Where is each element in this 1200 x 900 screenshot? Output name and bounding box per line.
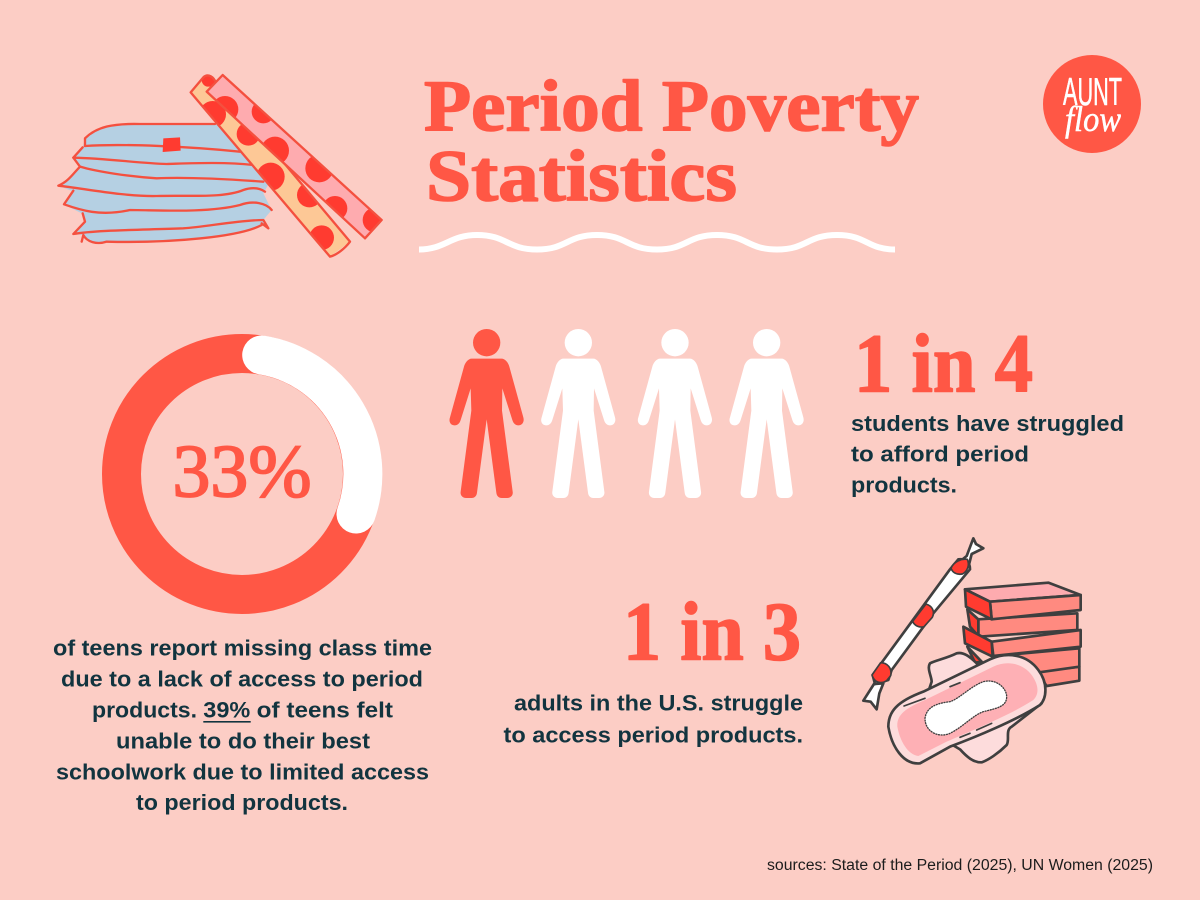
stat: 1 in 3: 1 in 3 (623, 585, 801, 678)
source note: sources: State of the Period (2025), UN Women (2025) (767, 857, 1153, 874)
stat: 1 in 4: 1 in 4 (854, 318, 1033, 411)
illustration: stacked pads and tampons (58, 73, 387, 257)
text: adults (504, 691, 803, 748)
text: teens missing class: 39% (203, 698, 250, 723)
text: teens missing class: of teens report missing class time (53, 636, 432, 661)
text: teens missing class: due to a lack of access to period (61, 667, 423, 692)
logo: Aunt Flow (1043, 55, 1141, 153)
text: students: students have struggled (851, 411, 1124, 436)
pictogram: 1 in 4 people (449, 329, 804, 498)
text: teens missing class: schoolwork due to limited access (56, 759, 429, 784)
title (424, 66, 919, 217)
text: teens missing class: to period products. (136, 790, 348, 815)
text: adults: to access period products. (504, 723, 803, 748)
text: students (851, 411, 1124, 498)
person white 3 (729, 329, 804, 498)
product boxes (963, 583, 1081, 686)
person highlighted (449, 329, 524, 498)
title: Period Poverty (424, 66, 919, 147)
person white 2 (638, 329, 712, 498)
sanitary pad (888, 653, 1045, 763)
tampon (863, 538, 983, 709)
title: Statistics (426, 136, 737, 217)
tampon: pink wrapper (207, 75, 387, 238)
text: teens missing class: of teens felt (257, 698, 394, 723)
illustration: period products (863, 538, 1081, 763)
text: teens missing class (53, 636, 432, 815)
text: teens missing class: unable to do their best (116, 728, 371, 753)
wavy underline (419, 235, 895, 250)
donut value: 33% (172, 431, 312, 514)
person white 1 (541, 329, 615, 498)
text: students: products. (851, 473, 957, 498)
text: students: to afford period (851, 442, 1029, 467)
tampon: orange wrapper (191, 73, 350, 257)
logo: Aunt Flow: flow (1065, 99, 1121, 139)
donut chart: 33% (122, 354, 363, 594)
text: teens missing class: products. (92, 698, 197, 723)
pad stack (58, 124, 272, 243)
logo: Aunt Flow: AUNT (1063, 71, 1122, 114)
text: adults: adults in the U.S. struggle (514, 691, 803, 716)
